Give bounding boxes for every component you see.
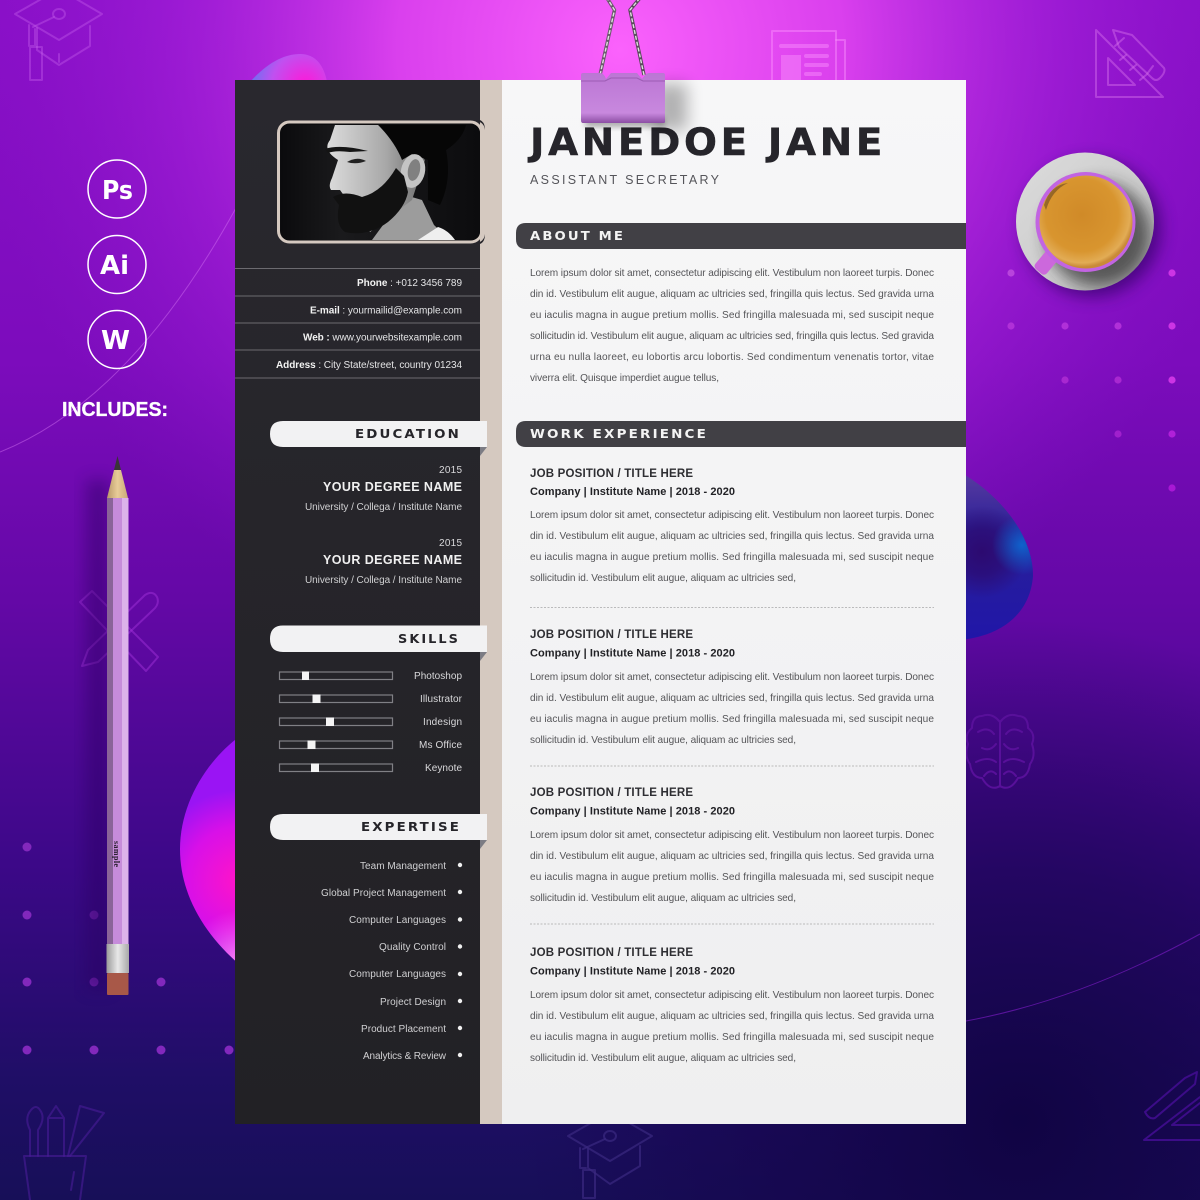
icon: Word: [88, 310, 146, 368]
label: includes: INCLUDES:: [62, 399, 168, 421]
job 4: JOB POSITION / TITLE HERE: [530, 947, 693, 959]
section: education: University / Collega / Institute Name: [305, 575, 462, 586]
icon: Word: W: [101, 326, 130, 356]
about text: sollicitudin id. Vestibulum elit augue, aliquam ac ultricies sed, fringilla quis lectus. Sed gravida: [530, 331, 934, 342]
section: education: [270, 421, 487, 586]
pencil: sample: [112, 841, 121, 867]
job 4: sollicitudin id. Vestibulum elit augue, aliquam ac ultricies sed,: [530, 1053, 796, 1064]
resume sheet: [235, 80, 966, 1124]
job 4: Lorem ipsum dolor sit amet, consectetur adipiscing elit. Vestibulum non laoreet turpis. Donec: [530, 990, 934, 1001]
binder clip: [581, 0, 687, 130]
icon: graduation cap bottom: [568, 1112, 652, 1198]
section: expertise: Team Management: [360, 861, 446, 872]
heading bar: [516, 421, 966, 447]
section: expertise: Global Project Management: [321, 888, 446, 899]
contact list: [235, 268, 480, 378]
decorative arc lines: [0, 208, 1200, 1021]
about text: viverra elit. Quisque imperdiet augue tellus,: [530, 373, 719, 384]
icon: set square and pencil top right: [1096, 30, 1164, 97]
about text: [530, 268, 934, 384]
icon: Illustrator: [88, 236, 146, 294]
section: skills: [270, 626, 487, 774]
job 3: [530, 787, 934, 904]
job 2: JOB POSITION / TITLE HERE: [530, 629, 693, 641]
icon: Illustrator: Ai: [100, 251, 129, 281]
section: skills: SKILLS: [398, 631, 460, 646]
dot grid right: [1007, 269, 1176, 492]
job 2: din id. Vestibulum elit augue, aliquam ac ultricies sed, fringilla quis lectus. Sed gravida urna: [530, 693, 934, 704]
section: education: 2015: [439, 465, 462, 476]
job 2: Company | Institute Name | 2018 - 2020: [530, 648, 735, 660]
icon: pencil cup bottom left: [24, 1106, 104, 1200]
heading bar: ABOUT ME: [530, 228, 625, 243]
icon: set square and pencil bottom right: [1144, 1072, 1200, 1140]
job 3: eu iaculis magna in augue pretium mollis. Sed fringilla malesuada mi, sed suscipit neque: [530, 872, 934, 883]
job 1: sollicitudin id. Vestibulum elit augue, aliquam ac ultricies sed,: [530, 573, 796, 584]
section: education: YOUR DEGREE NAME: [323, 480, 462, 494]
about text: eu iaculis magna in augue pretium mollis. Sed fringilla malesuada mi, sed suscipit neque: [530, 310, 934, 321]
skill: Illustrator: [280, 694, 463, 705]
skill: Photoshop: [280, 671, 462, 682]
job 4: eu iaculis magna in augue pretium mollis. Sed fringilla malesuada mi, sed suscipit neque: [530, 1032, 934, 1043]
icon: newspaper top: [772, 31, 845, 80]
blob right: [960, 472, 1033, 640]
icon: Photoshop: [88, 160, 146, 218]
white page: [502, 80, 966, 1124]
job 2: [530, 629, 934, 746]
phone: Phone : +012 3456 789: [357, 278, 462, 289]
section: expertise: Computer Languages: [349, 915, 446, 926]
section: expertise: [270, 814, 487, 1062]
job 1: JOB POSITION / TITLE HERE: [530, 468, 693, 480]
about text: Lorem ipsum dolor sit amet, consectetur adipiscing elit. Vestibulum non laoreet turpis. Donec: [530, 268, 934, 279]
job 4: din id. Vestibulum elit augue, aliquam ac ultricies sed, fringilla quis lectus. Sed gravida urna: [530, 1011, 934, 1022]
heading bar: [516, 223, 966, 249]
job 3: Company | Institute Name | 2018 - 2020: [530, 806, 735, 818]
skill: Indesign: Indesign: [423, 717, 462, 728]
job 4: [530, 947, 934, 1064]
job 1: Company | Institute Name | 2018 - 2020: [530, 486, 735, 498]
section: expertise: Product Placement: [361, 1024, 446, 1035]
skill: Photoshop: Photoshop: [414, 671, 462, 682]
web: Web : www.yourwebsitexample.com: [303, 332, 462, 344]
address: Address : City State/street, country 01234: [276, 360, 462, 371]
job 3: JOB POSITION / TITLE HERE: [530, 787, 693, 799]
icon: brain: [966, 715, 1034, 788]
blob top: [250, 54, 327, 82]
dark sidebar: [235, 80, 480, 1124]
job 2: Lorem ipsum dolor sit amet, consectetur adipiscing elit. Vestibulum non laoreet turpis. Donec: [530, 672, 934, 683]
job 1: eu iaculis magna in augue pretium mollis. Sed fringilla malesuada mi, sed suscipit neque: [530, 552, 934, 563]
job 3: din id. Vestibulum elit augue, aliquam ac ultricies sed, fringilla quis lectus. Sed gravida urna: [530, 851, 934, 862]
job 3: Lorem ipsum dolor sit amet, consectetur adipiscing elit. Vestibulum non laoreet turpis. Donec: [530, 830, 934, 841]
pencil: [86, 456, 129, 995]
section: expertise: Quality Control: [379, 942, 446, 953]
job 1: [530, 468, 934, 584]
job 4: Company | Institute Name | 2018 - 2020: [530, 966, 735, 978]
section: about me: [516, 223, 966, 384]
beige stripe: [480, 80, 502, 1124]
job 3: sollicitudin id. Vestibulum elit augue, aliquam ac ultricies sed,: [530, 893, 796, 904]
job 1: din id. Vestibulum elit augue, aliquam ac ultricies sed, fringilla quis lectus. Sed gravida urna: [530, 531, 934, 542]
section: expertise: Computer Languages: [349, 969, 446, 980]
job title: ASSISTANT SECRETARY: [530, 173, 720, 187]
about text: urna eu nulla laoreet, eu lobortis arcu lobortis. Sed condimentum venenatis tortor, vitae: [530, 352, 934, 363]
skill: Ms Office: [280, 740, 462, 751]
section: expertise: EXPERTISE: [361, 819, 461, 834]
section: expertise: Analytics & Review: [363, 1051, 447, 1062]
job 2: eu iaculis magna in augue pretium mollis. Sed fringilla malesuada mi, sed suscipit neque: [530, 714, 934, 725]
skill: Illustrator: Illustrator: [420, 694, 463, 705]
skill: Ms Office: Ms Office: [419, 740, 462, 751]
name: JANEDOE JANE: [527, 121, 886, 164]
software icons: Ps, Ai, W: [88, 160, 146, 368]
profile photo: [278, 120, 485, 244]
heading bar: WORK EXPERIENCE: [530, 426, 708, 441]
coffee cup on saucer: [1016, 152, 1161, 297]
skill: Keynote: Keynote: [425, 763, 462, 774]
section: education: 2015: [439, 538, 462, 549]
icon: ruler and pencil cross: [80, 591, 158, 671]
icon: Photoshop: Ps: [102, 176, 133, 206]
skill: Indesign: [280, 717, 462, 728]
section: education: EDUCATION: [355, 426, 461, 441]
icon: graduation cap top left: [15, 0, 102, 80]
section: work experience: [516, 421, 966, 1064]
blob left: [180, 736, 240, 965]
section: expertise: Project Design: [380, 997, 446, 1008]
section: education: YOUR DEGREE NAME: [323, 553, 462, 567]
job 1: Lorem ipsum dolor sit amet, consectetur adipiscing elit. Vestibulum non laoreet turpis. Donec: [530, 510, 934, 521]
skill: Keynote: [280, 763, 462, 774]
dot grid bottom left: [22, 842, 234, 1054]
email: E-mail : yourmailid@example.com: [310, 306, 462, 316]
section: education: University / Collega / Institute Name: [305, 502, 462, 513]
job 2: sollicitudin id. Vestibulum elit augue, aliquam ac ultricies sed,: [530, 735, 796, 746]
about text: din id. Vestibulum elit augue, aliquam ac ultricies sed, fringilla quis lectus. Sed gravida urna: [530, 289, 934, 300]
